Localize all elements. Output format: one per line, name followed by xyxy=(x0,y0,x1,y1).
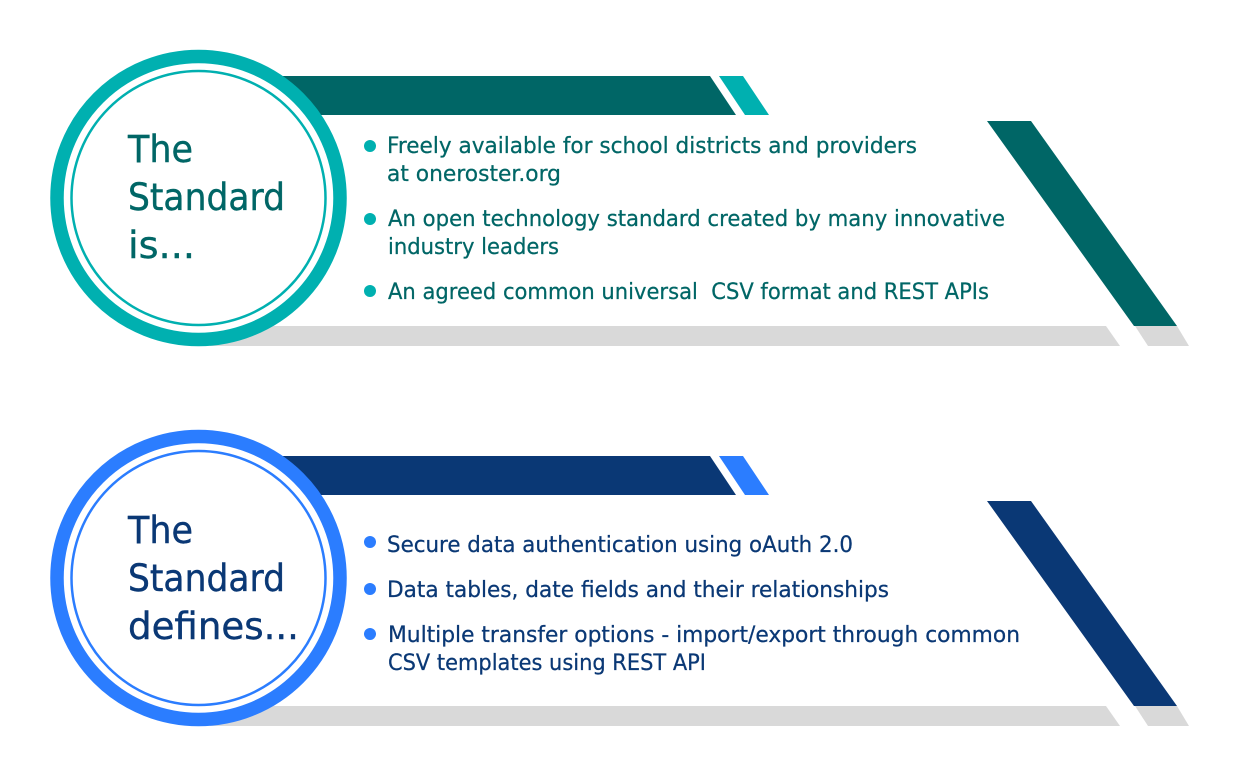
gray base accent xyxy=(1135,706,1189,726)
dark diagonal band xyxy=(987,121,1177,326)
bullet list xyxy=(364,533,1020,676)
bullet item 1: Secure data authentication using oAuth 2.0 xyxy=(387,533,853,558)
bullet item 2 xyxy=(364,207,1005,260)
dark top bar xyxy=(270,76,736,115)
bullet item 1: at oneroster.org xyxy=(387,162,561,187)
gray base bar xyxy=(210,326,1120,346)
bullet item 3: CSV templates using REST API xyxy=(388,651,706,676)
bullet item 2: industry leaders xyxy=(388,235,559,260)
bullet list xyxy=(364,134,1005,305)
navy diagonal band xyxy=(987,501,1177,706)
heading: is... xyxy=(128,224,195,267)
circle badge xyxy=(57,436,340,720)
heading: Standard xyxy=(128,176,285,219)
blue top accent xyxy=(719,456,769,495)
gray base bar xyxy=(210,706,1120,726)
navy top bar xyxy=(270,456,736,495)
teal top accent xyxy=(719,76,769,115)
circle badge xyxy=(57,56,340,340)
heading: defines... xyxy=(128,605,299,648)
panel: The Standard defines xyxy=(57,436,1189,726)
heading: The xyxy=(127,509,193,552)
heading xyxy=(127,128,285,267)
heading xyxy=(127,509,299,648)
bullet item 1: Freely available for school districts and providers xyxy=(387,134,917,159)
panel: The Standard is xyxy=(57,56,1189,346)
bullet item 2: An open technology standard created by many innovative xyxy=(388,207,1005,232)
bullet item 3 xyxy=(364,623,1020,676)
bullet item 1 xyxy=(364,134,917,187)
bullet item 2: Data tables, date fields and their relationships xyxy=(387,578,889,603)
heading: Standard xyxy=(128,557,285,600)
heading: The xyxy=(127,128,193,171)
gray base accent xyxy=(1135,326,1189,346)
bullet item 3: Multiple transfer options - import/export through common xyxy=(388,623,1020,648)
bullet item 3: An agreed common universal CSV format and REST APIs xyxy=(388,280,989,305)
